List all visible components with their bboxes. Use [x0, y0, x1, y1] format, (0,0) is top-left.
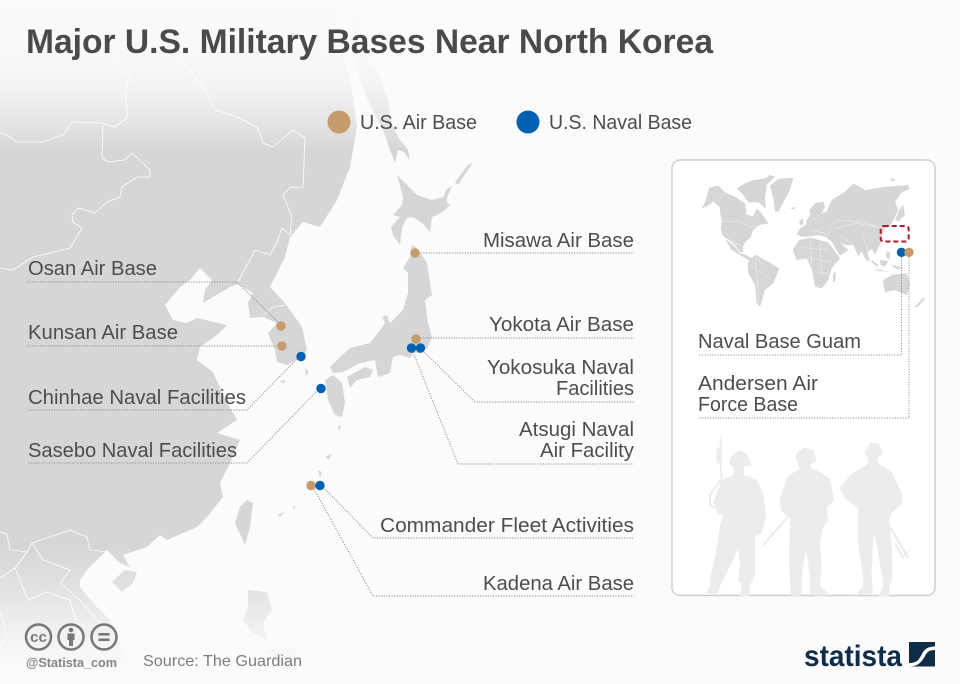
marker: Yokosuka Naval Facilities — [416, 343, 425, 353]
marker: Andersen Air Force Base — [904, 248, 914, 257]
marker: Kunsan Air Base — [277, 341, 287, 351]
label: Misawa Air Base: Misawa Air Base — [483, 230, 634, 252]
southern Philippines — [263, 647, 313, 684]
label: Naval Base Guam: Naval Base Guam — [698, 331, 861, 353]
label: Sasebo Naval Facilities: Sasebo Naval Facilities — [28, 440, 237, 462]
soldiers 1 and 2 — [706, 437, 834, 598]
label: Andersen Air Force Base: Force Base — [698, 394, 798, 416]
label: Atsugi Naval Air Facility — [519, 419, 634, 462]
source: Source: The Guardian — [143, 653, 302, 670]
label: Commander Fleet Activities: Commander Fleet Activities — [380, 515, 634, 537]
label: Yokota Air Base: Yokota Air Base — [489, 314, 634, 336]
soldier 1 — [706, 437, 766, 597]
Hokkaido — [391, 175, 450, 245]
Kyushu — [325, 375, 345, 417]
Hainan — [112, 570, 137, 592]
label: Yokosuka Naval Facilities: Facilities — [556, 378, 634, 400]
statista logo — [804, 640, 935, 673]
label: Andersen Air Force Base — [698, 373, 818, 416]
Taiwan — [235, 500, 253, 545]
label: Atsugi Naval Air Facility: Atsugi Naval — [519, 419, 634, 441]
icon: attribution — [58, 624, 84, 650]
label: Kadena Air Base: Kadena Air Base — [483, 573, 634, 595]
Eurasia, Africa, Oceania — [791, 178, 925, 308]
small islands — [277, 368, 341, 517]
title: Major U.S. Military Bases Near North Korea — [26, 23, 714, 61]
icons: creative commons — [26, 624, 116, 650]
label: Yokosuka Naval Facilities: Yokosuka Naval — [487, 357, 634, 379]
label: Osan Air Base: Osan Air Base — [28, 258, 157, 280]
label: Kunsan Air Base: Kunsan Air Base — [28, 322, 178, 344]
soldier 3 — [840, 443, 910, 597]
marker: Yokota Air Base — [411, 334, 421, 344]
logo mark — [909, 642, 935, 666]
map: East Asia — [0, 0, 473, 684]
marker: Misawa Air Base — [410, 248, 420, 258]
icon: no derivatives — [92, 624, 116, 650]
soldier silhouettes — [706, 437, 910, 598]
legend: naval base: U.S. Naval Base — [549, 112, 692, 134]
panel frame — [672, 160, 935, 596]
Shikoku — [347, 367, 373, 388]
label: Andersen Air Force Base: Andersen Air — [698, 373, 818, 395]
label: Atsugi Naval Air Facility: Air Facility — [540, 440, 634, 462]
legend — [328, 110, 692, 134]
label: Chinhae Naval Facilities: Chinhae Naval Facilities — [28, 387, 246, 409]
marker: Commander Fleet Activities — [315, 481, 325, 490]
marker: Atsugi Naval Air Facility — [407, 343, 416, 353]
Honshu — [330, 245, 432, 377]
wordmark: statista — [804, 640, 902, 673]
legend: air base: U.S. Air Base — [360, 112, 477, 134]
leader lines — [27, 253, 634, 596]
Sakhalin — [345, 0, 410, 163]
marker: Chinhae Naval Facilities — [296, 352, 306, 361]
marker: Sasebo Naval Facilities — [316, 384, 326, 393]
mainland Asia — [0, 0, 357, 684]
highlight box — [881, 226, 909, 242]
marker: Osan Air Base — [276, 321, 286, 331]
label: Yokosuka Naval Facilities — [487, 357, 634, 400]
Luzon — [243, 590, 272, 640]
marker: Kadena Air Base — [306, 481, 316, 490]
soldier 2 — [763, 447, 834, 598]
world map — [702, 175, 925, 308]
Kuril islands — [444, 163, 473, 198]
country borders — [0, 60, 305, 648]
leader lines — [698, 257, 909, 418]
icon: cc: cc — [30, 629, 47, 646]
handle: @Statista_com — [26, 655, 117, 670]
marker: Naval Base Guam — [897, 248, 906, 257]
Americas — [702, 175, 795, 307]
panel: Guam inset — [672, 160, 935, 598]
